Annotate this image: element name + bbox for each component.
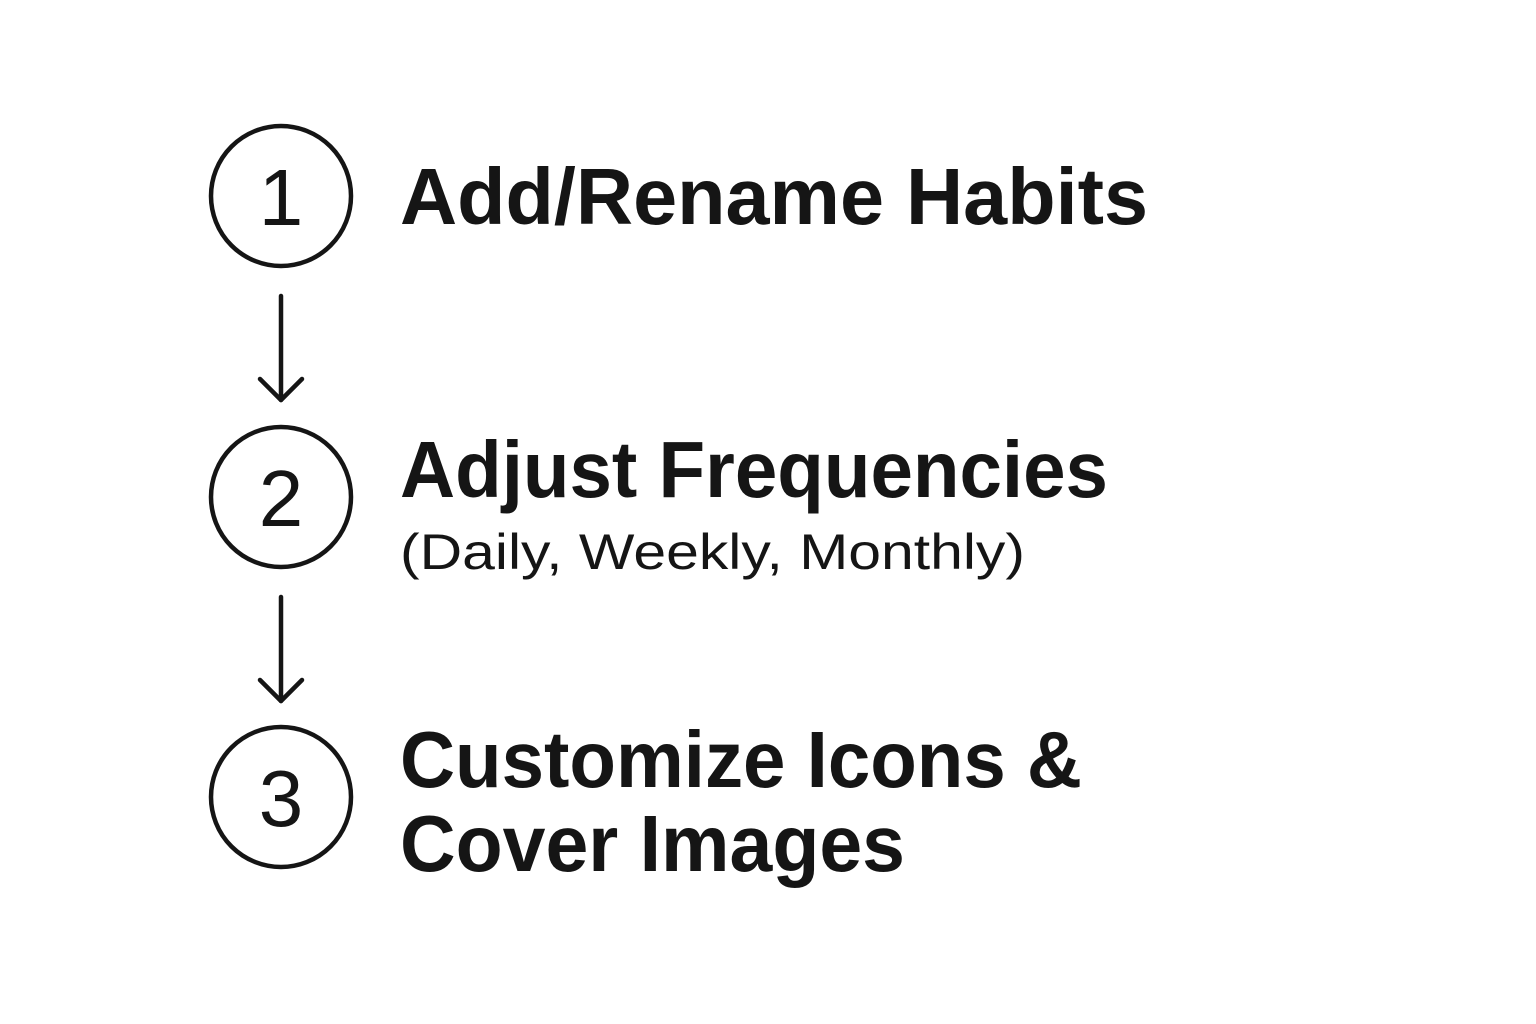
heading: Add/Rename Habits: Add/Rename Habits	[400, 152, 1148, 241]
icon: circle number 1: 1	[259, 153, 303, 242]
heading: Customize Icons & Cover Images: Customize Icons &	[400, 715, 1082, 804]
icon: circle number 3	[211, 727, 351, 867]
step 3	[211, 715, 1082, 888]
heading: Customize Icons & Cover Images	[400, 715, 1082, 888]
subtext: frequencies: (Daily, Weekly, Monthly)	[400, 524, 1025, 580]
arrow 1	[260, 296, 302, 400]
icon: circle number 3: 3	[259, 754, 303, 843]
heading: Adjust Frequencies: Adjust Frequencies	[400, 425, 1108, 514]
step 1	[211, 126, 1148, 266]
arrow 2	[260, 597, 302, 701]
heading: Customize Icons & Cover Images: Cover Images	[400, 799, 905, 888]
icon: circle number 2	[211, 427, 351, 567]
step 2	[211, 425, 1108, 580]
icon: circle number 1	[211, 126, 351, 266]
icon: circle number 2: 2	[259, 454, 303, 543]
